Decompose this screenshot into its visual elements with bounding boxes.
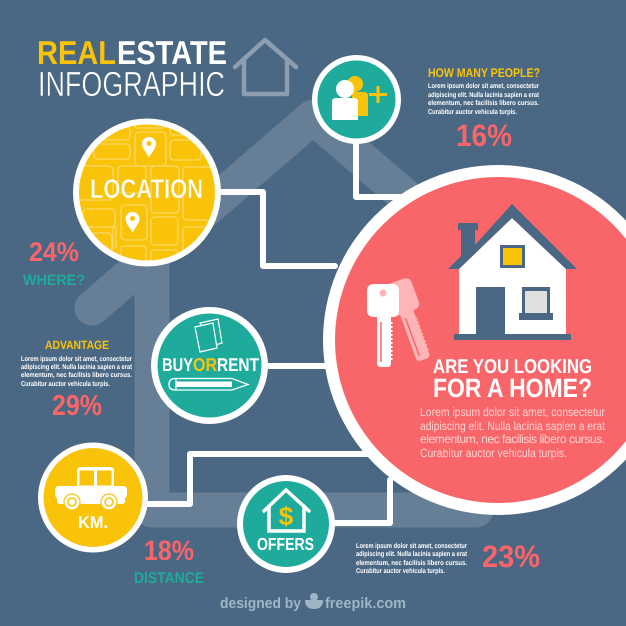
text block: how many people: Lorem ipsum dolor sit amet, consectetur <box>428 82 539 90</box>
icon: white key <box>367 284 399 367</box>
icon: people plus <box>332 76 387 120</box>
stat: 18% distance: 18% <box>144 535 194 566</box>
stat: 24% where <box>23 237 85 289</box>
panel: offers circle <box>237 475 335 573</box>
icon: map pin top <box>142 137 156 158</box>
credit: designed by freepik <box>220 593 406 612</box>
title <box>37 34 227 104</box>
text block: advantage: adipiscing elit. Nulla lacinia sapien a erat <box>21 363 133 371</box>
buy or rent label: OR <box>193 354 217 375</box>
heading: are you looking for a home: FOR A HOME? <box>433 373 592 403</box>
icon: house with dollar: $ <box>279 501 294 531</box>
title: ESTATE <box>117 34 227 71</box>
panel: people circle <box>312 55 401 144</box>
icon: car <box>55 467 127 510</box>
offers label: OFFERS <box>257 534 314 554</box>
text block: bottom lorem <box>356 542 468 575</box>
text block: advantage: Curabitur auctor vehicula turpis. <box>21 380 110 388</box>
text block: advantage: ADVANTAGE <box>45 338 109 352</box>
stat: 23%: 23% <box>482 539 540 574</box>
buy or rent label <box>162 354 260 375</box>
text block: advantage: Lorem ipsum dolor sit amet, consectetur <box>21 355 132 363</box>
icon: pink key <box>379 276 438 365</box>
main body text <box>420 405 606 460</box>
map pattern <box>75 123 215 265</box>
ghost background house arrow <box>92 117 476 510</box>
text block: bottom lorem: adipiscing elit. Nulla lacinia sapien a erat <box>356 550 468 558</box>
main body text: elementum, nec facilisis libero cursus. <box>420 432 605 446</box>
text block: bottom lorem: elementum, nec facilisis libero cursus. <box>356 559 467 567</box>
heading: are you looking for a home <box>433 356 592 403</box>
panel: location circle <box>73 118 221 266</box>
stat: 18% distance <box>134 535 204 587</box>
stat: 24% where: WHERE? <box>23 272 85 289</box>
icon: map pin bottom <box>126 212 140 232</box>
text block: how many people <box>428 66 540 116</box>
credit: designed by freepik: designed by <box>220 595 302 612</box>
credit: designed by freepik: freepik.com <box>325 595 406 612</box>
icon: outline house <box>235 40 296 94</box>
main body text: Curabitur auctor vehicula turpis. <box>420 446 567 460</box>
text block: how many people: HOW MANY PEOPLE? <box>428 66 540 80</box>
panel: km car circle <box>38 442 148 552</box>
text block: bottom lorem: Lorem ipsum dolor sit amet, consectetur <box>356 542 467 550</box>
icon: documents <box>195 319 222 352</box>
buy or rent label: BUY <box>162 354 194 375</box>
text block: advantage: elementum, nec facilisis libero cursus. <box>21 371 132 379</box>
stat: 24% where: 24% <box>29 237 79 267</box>
text block: how many people: adipiscing elit. Nulla lacinia sapien a erat <box>428 91 540 99</box>
panel: buy or rent circle <box>151 307 268 424</box>
buy or rent label: RENT <box>217 354 260 375</box>
title: REAL <box>37 34 116 71</box>
title: INFOGRAPHIC <box>38 65 225 104</box>
km label: KM. <box>78 513 108 532</box>
stat: 29%: 29% <box>52 390 102 422</box>
location label: LOCATION <box>90 174 203 204</box>
text block: how many people: elementum, nec facilisis libero cursus. <box>428 99 539 107</box>
text block: how many people: Curabitur auctor vehicula turpis. <box>428 108 517 116</box>
stat: 16%: 16% <box>456 118 512 153</box>
icon: pencil <box>169 378 248 390</box>
text block: advantage <box>21 338 133 388</box>
stat: 18% distance: DISTANCE <box>134 570 204 587</box>
connector lines <box>147 144 412 523</box>
icon: house <box>448 204 577 340</box>
heading: are you looking for a home: ARE YOU LOOKING <box>433 356 592 378</box>
panel: main circle <box>323 165 626 515</box>
text block: bottom lorem: Curabitur auctor vehicula turpis. <box>356 567 445 575</box>
